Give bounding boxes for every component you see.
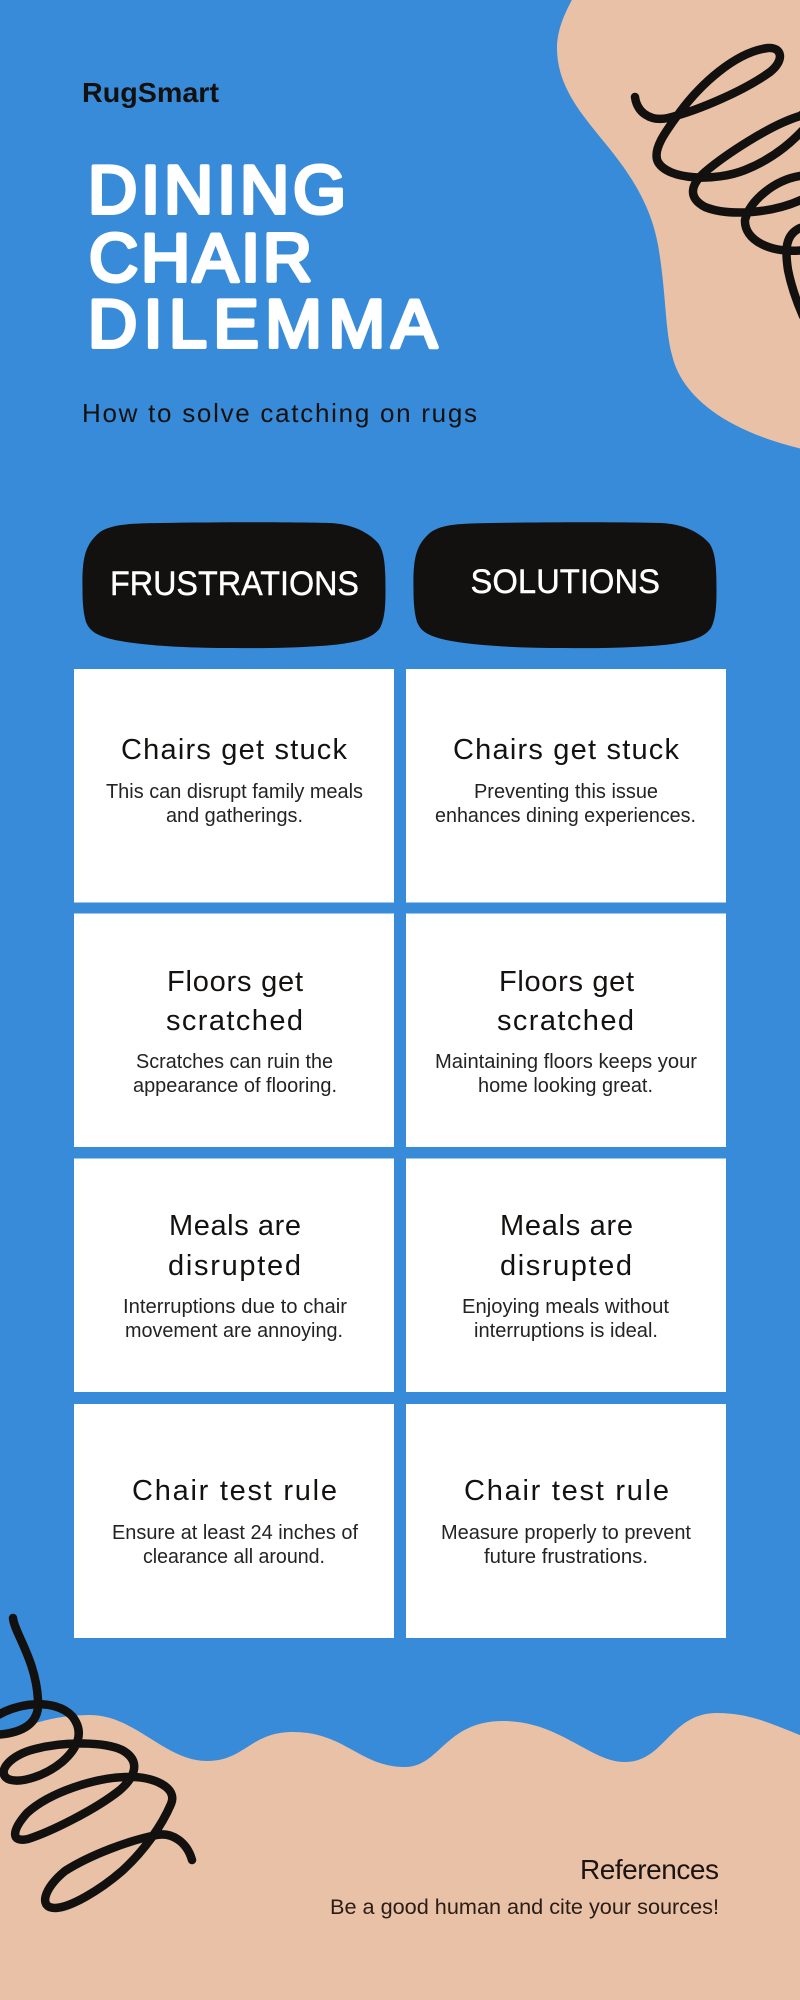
card: frustration, chair test rule: Ensure at least 24 inches of <box>112 1522 358 1544</box>
card: frustration, floors get scratched: scratched <box>166 1005 303 1037</box>
card: frustration, floors get scratched: Scratches can ruin the <box>136 1051 333 1073</box>
card: frustration, floors get scratched <box>74 914 394 1147</box>
card: solution, chairs get stuck: Preventing this issue <box>474 781 658 803</box>
references heading: References <box>580 1854 719 1885</box>
title: CHAIR <box>89 220 312 296</box>
card: frustration, chairs get stuck: This can disrupt family meals <box>106 781 363 803</box>
title: DINING <box>88 152 346 228</box>
card: solution, chair test rule: Measure properly to prevent <box>441 1522 691 1544</box>
column header: solutions <box>413 522 716 648</box>
card: frustration, meals are disrupted: Interruptions due to chair <box>123 1296 347 1318</box>
card: frustration, floors get scratched: appearance of flooring. <box>133 1075 337 1097</box>
card: frustration, floors get scratched: Floors get <box>167 966 303 998</box>
card: frustration, chairs get stuck: Chairs get stuck <box>121 734 348 766</box>
card: solution, meals are disrupted: Enjoying meals without <box>462 1296 669 1318</box>
references text: Be a good human and cite your sources! <box>330 1896 719 1919</box>
card: solution, floors get scratched: Maintaining floors keeps your <box>435 1051 697 1073</box>
card: solution, floors get scratched: scratched <box>497 1005 634 1037</box>
card: solution, meals are disrupted: Meals are <box>500 1210 633 1242</box>
card: solution, floors get scratched <box>406 914 726 1147</box>
card: frustration, meals are disrupted <box>74 1158 394 1392</box>
title: DILEMMA <box>88 286 438 362</box>
card: solution, floors get scratched: home looking great. <box>478 1075 653 1097</box>
card: solution, meals are disrupted <box>406 1158 726 1392</box>
blob: bottom peach wave <box>0 1713 800 2000</box>
card: solution, chairs get stuck: enhances dining experiences. <box>435 805 696 827</box>
card: solution, chairs get stuck <box>406 669 726 902</box>
card: solution, chair test rule: Chair test rule <box>464 1475 669 1507</box>
card: frustration, chairs get stuck: and gatherings. <box>166 805 303 827</box>
card: solution, chair test rule: future frustrations. <box>484 1546 648 1568</box>
blob: top right peach shape <box>557 0 800 449</box>
brand name: RugSmart <box>82 77 219 108</box>
card: frustration, chair test rule <box>74 1404 394 1638</box>
icon: top right black scribble <box>635 48 800 316</box>
title <box>88 152 438 362</box>
column header: frustrations: FRUSTRATIONS <box>110 565 359 603</box>
column header: frustrations <box>82 522 385 648</box>
card: frustration, chair test rule: Chair test rule <box>132 1475 337 1507</box>
card: frustration, meals are disrupted: disrupted <box>168 1250 301 1282</box>
subtitle: How to solve catching on rugs <box>82 398 477 428</box>
card: frustration, chairs get stuck <box>74 669 394 902</box>
card: solution, meals are disrupted: interruptions is ideal. <box>474 1320 658 1342</box>
card: solution, floors get scratched: Floors get <box>499 966 634 998</box>
column header: solutions: SOLUTIONS <box>470 563 660 601</box>
icon: bottom left black scribble <box>0 1618 192 1908</box>
card: frustration, meals are disrupted: movement are annoying. <box>125 1320 343 1342</box>
card: frustration, chair test rule: clearance all around. <box>143 1546 325 1568</box>
card: frustration, meals are disrupted: Meals are <box>169 1210 301 1242</box>
card: solution, meals are disrupted: disrupted <box>500 1250 632 1282</box>
card: solution, chair test rule <box>406 1404 726 1638</box>
card: solution, chairs get stuck: Chairs get stuck <box>453 734 680 766</box>
